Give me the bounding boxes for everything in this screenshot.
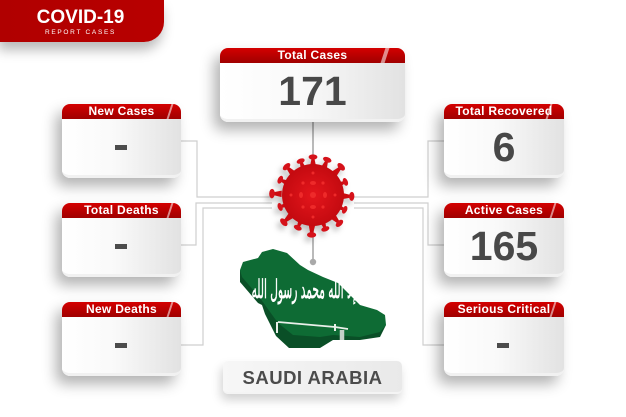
panel: total deaths: Total Deaths [84, 203, 159, 217]
flag sword [277, 322, 348, 340]
map extrusion [240, 270, 386, 348]
panel: new cases: New Cases [88, 104, 155, 118]
subtitle: REPORT CASES [45, 29, 116, 36]
panel: total cases: 171 [278, 68, 347, 114]
panel: total recovered: 6 [493, 124, 515, 170]
panel: total deaths [62, 203, 181, 277]
header banner [0, 0, 164, 42]
icon: virus [264, 154, 354, 244]
panel: new deaths: New Deaths [86, 302, 157, 316]
panel: active cases [444, 203, 564, 277]
panel: total recovered [444, 104, 564, 178]
panel: total recovered: Total Recovered [456, 104, 552, 118]
panel: serious critical: Serious Critical [458, 302, 550, 316]
flag inscription: لا إله إلا الله محمد رسول الله [252, 274, 380, 306]
panel: total cases [220, 48, 405, 122]
panel: total cases: Total Cases [278, 48, 347, 62]
panel: new cases [62, 104, 181, 178]
map top face [240, 249, 386, 337]
panel: serious critical [444, 302, 564, 376]
panel: active cases: Active Cases [465, 203, 543, 217]
country label [223, 361, 402, 394]
title: COVID-19 [37, 7, 124, 28]
country label: SAUDI ARABIA [243, 367, 382, 388]
panel: new deaths [62, 302, 181, 376]
map: Saudi Arabia flag [240, 249, 386, 348]
panel: active cases: 165 [470, 223, 538, 269]
